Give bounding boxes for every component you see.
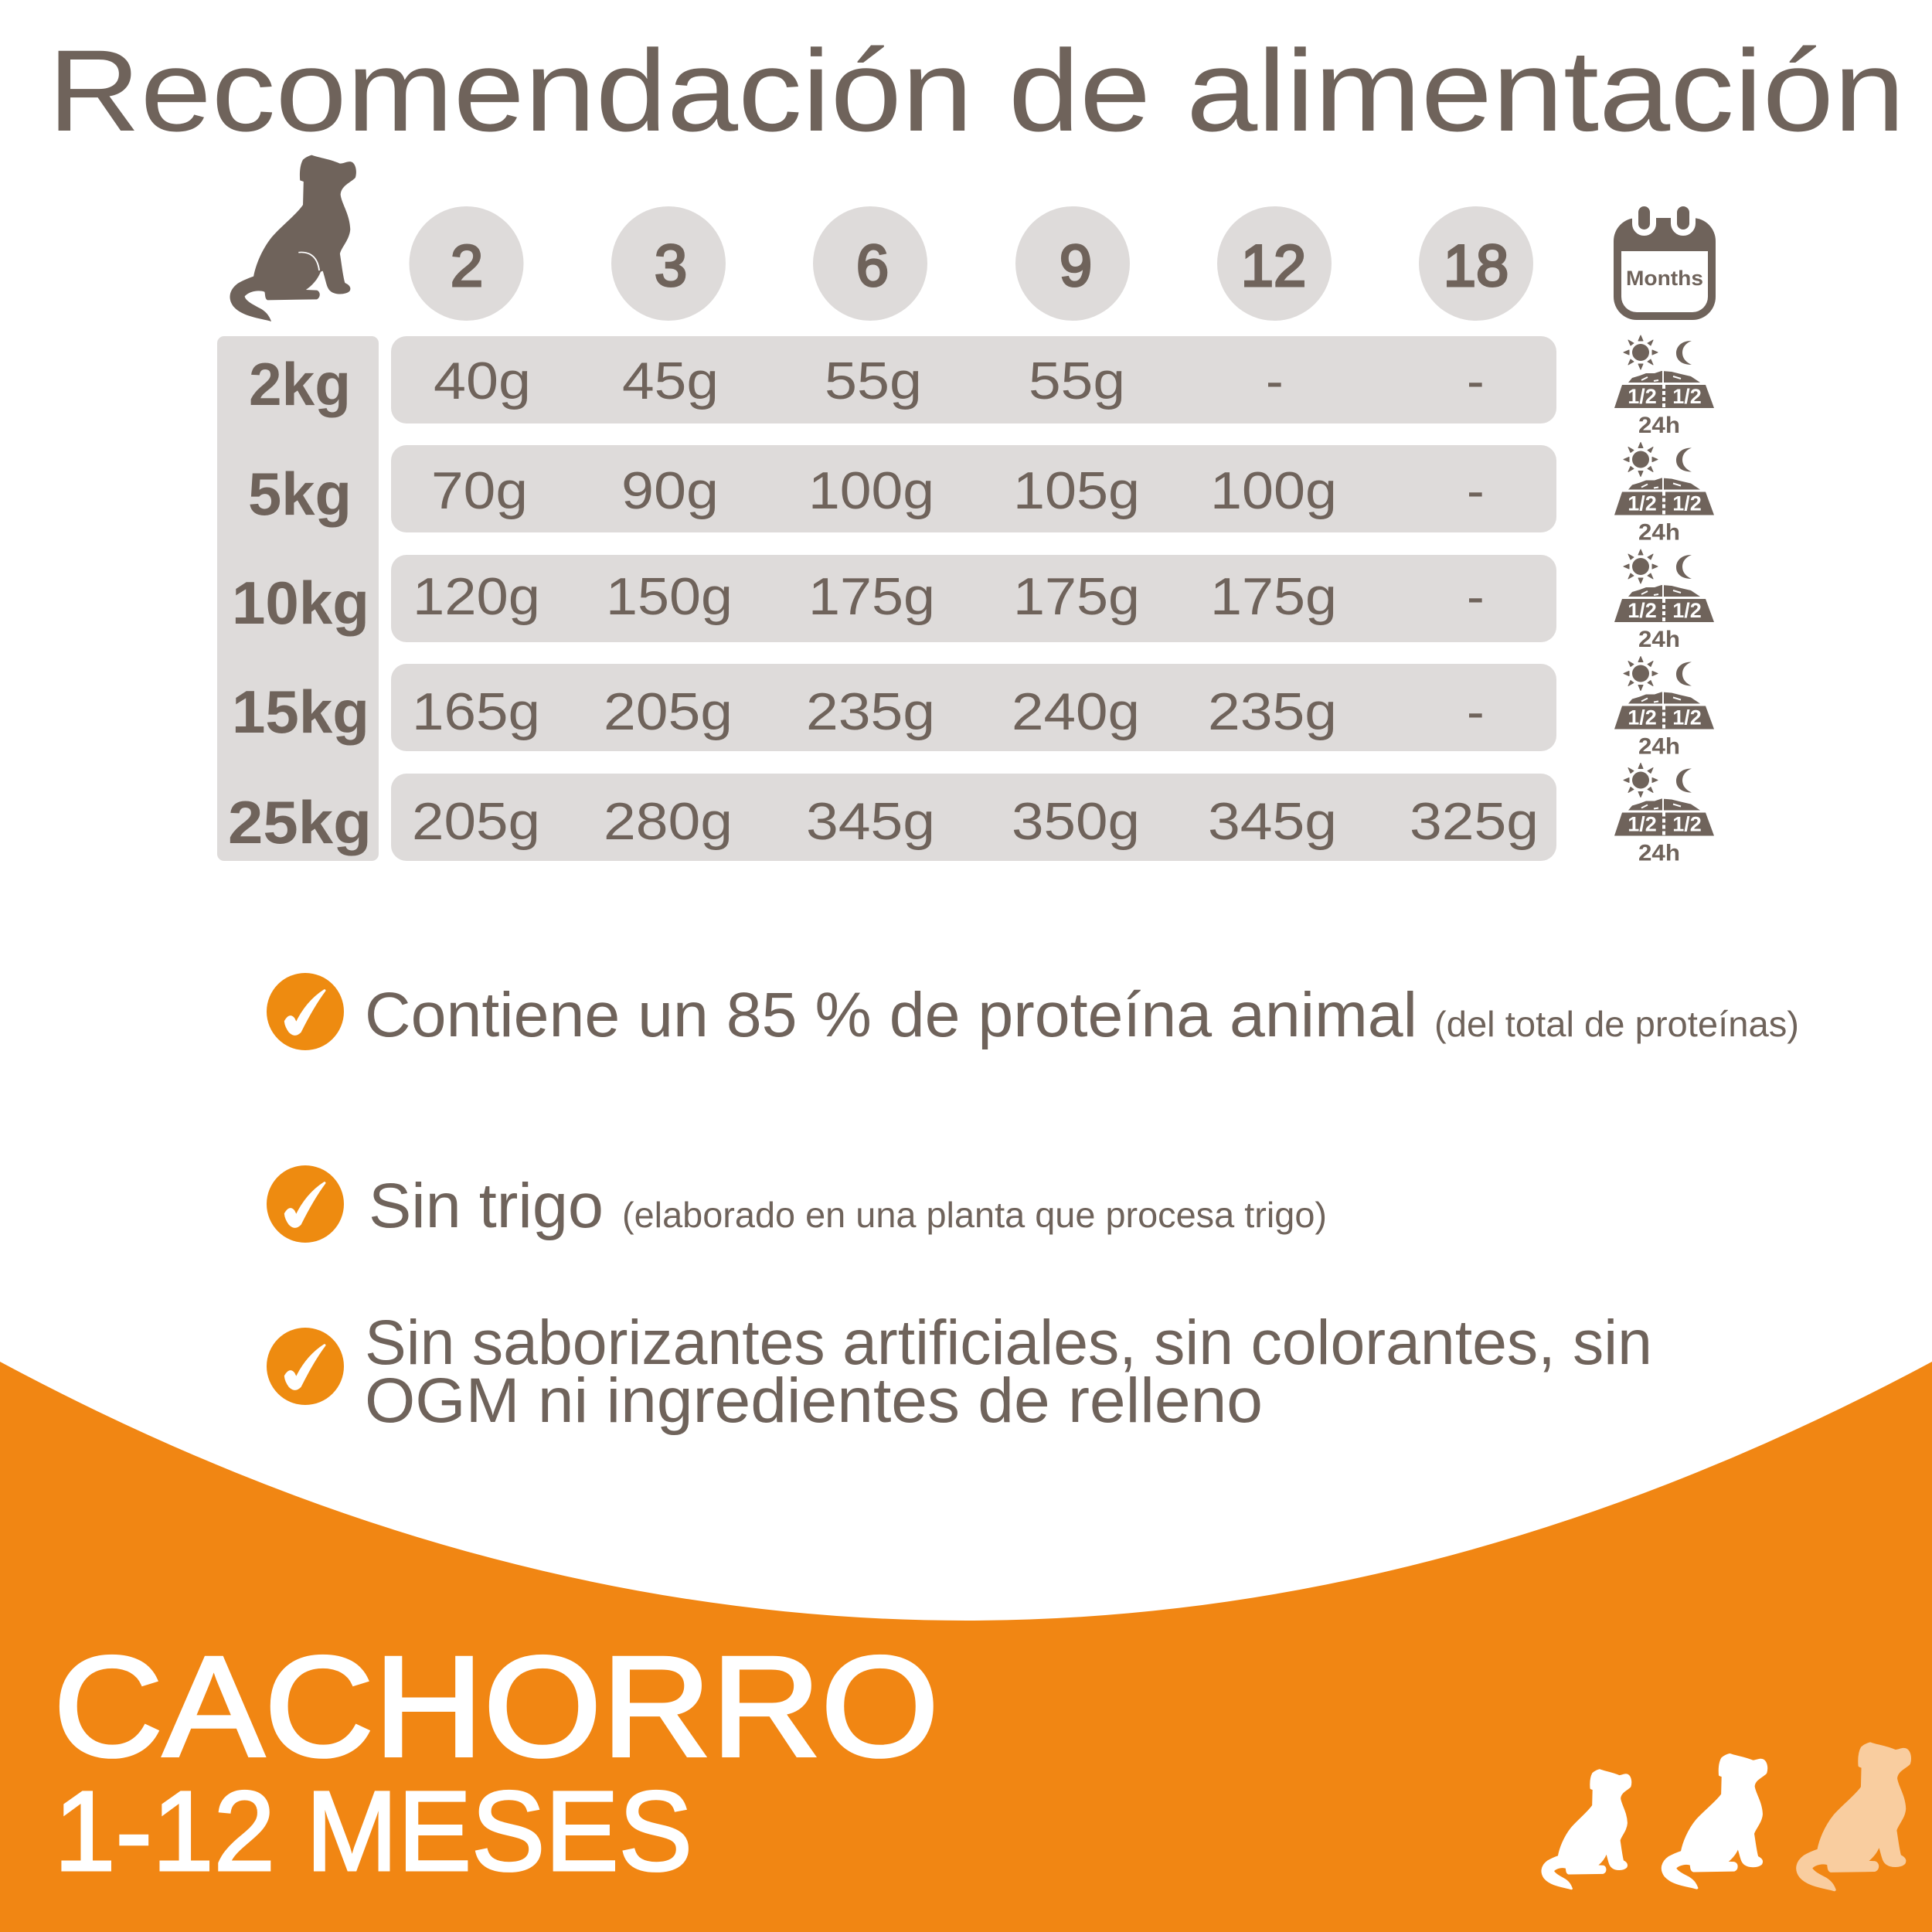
row: 25kg: 205g — [412, 792, 540, 851]
footer subheading: age: 1-12 MESES — [54, 1768, 692, 1895]
icon: feeding 15kg: 1/2 — [1672, 706, 1702, 730]
age header circles — [410, 206, 1533, 321]
age header circles: 9 — [1060, 233, 1092, 299]
row: 10kg: 175g — [1210, 567, 1337, 626]
icon: feeding 25kg: 1/2 — [1672, 813, 1702, 836]
benefit: wheat free: Sin trigo — [369, 1171, 604, 1241]
icon: feeding 25kg: 24h — [1638, 841, 1680, 866]
benefit: animal protein: Contiene un 85 % de proteína animal — [365, 980, 1417, 1050]
icon: feeding 15kg — [1614, 657, 1714, 759]
icon: feeding 25kg: 1/2 — [1628, 813, 1657, 836]
row: 2kg: - — [1467, 352, 1485, 410]
row: 25kg: 345g — [1208, 792, 1337, 851]
icon: feeding 10kg: 1/2 — [1628, 599, 1657, 622]
icon: months calendar — [1614, 206, 1716, 320]
age header circles: 2 — [451, 233, 483, 299]
row: 2kg: 55g — [1029, 352, 1125, 410]
icon: check 1 — [267, 973, 344, 1050]
benefit: no artificial additives: OGM ni ingredientes de relleno — [365, 1366, 1263, 1436]
icon: feeding 5kg: 1/2 — [1628, 492, 1657, 515]
row: 2kg: 40g — [434, 352, 531, 410]
row: 5kg: 70g — [431, 461, 528, 520]
icon: large puppy — [1798, 1743, 1910, 1889]
icon: feeding 15kg: 1/2 — [1628, 706, 1657, 730]
row: 5kg: 100g — [808, 461, 934, 520]
icon: feeding 2kg — [1614, 335, 1714, 438]
row: 25kg: 350g — [1012, 792, 1140, 851]
orange footer background — [0, 1362, 1932, 1932]
icon: feeding 15kg: 24h — [1638, 734, 1680, 759]
row: 25kg — [391, 774, 1556, 861]
icon: feeding 5kg: 24h — [1638, 519, 1680, 546]
footer heading: cachorro: CACHORRO — [53, 1628, 939, 1787]
weight column: 2kg — [249, 350, 351, 418]
benefit: wheat free — [369, 1171, 1327, 1241]
row: 15kg: - — [1467, 682, 1485, 741]
row: 2kg: - — [1266, 352, 1284, 410]
row: 5kg: 90g — [621, 461, 719, 520]
age header circles: 6 — [856, 233, 889, 299]
row: 10kg: 150g — [606, 567, 733, 626]
title: Recomendación de alimentación — [48, 26, 1905, 155]
row: 5kg: 105g — [1013, 461, 1140, 520]
benefit: no artificial additives: Sin saborizantes artificiales, sin colorantes, sin — [365, 1308, 1652, 1378]
age header circles: 18 — [1444, 233, 1509, 299]
row: 15kg: 235g — [806, 682, 935, 741]
weight column: 5kg — [248, 460, 352, 528]
benefit: wheat free: (elaborado en una planta que procesa trigo) — [622, 1195, 1327, 1235]
row: 10kg: 175g — [808, 567, 935, 626]
icon: feeding 10kg: 24h — [1638, 627, 1680, 652]
row: 15kg: 205g — [604, 682, 733, 741]
icon: check 3 — [267, 1328, 344, 1405]
row: 10kg — [391, 555, 1556, 642]
icon: feeding 10kg: 1/2 — [1672, 599, 1702, 622]
icon: feeding 5kg: 1/2 — [1672, 492, 1702, 515]
row: 25kg: 280g — [604, 792, 733, 851]
benefit: no artificial additives — [365, 1308, 1652, 1436]
row: 10kg: - — [1467, 567, 1485, 626]
row: 15kg: 240g — [1012, 682, 1140, 741]
weight column — [217, 336, 379, 861]
row: 15kg — [391, 664, 1556, 751]
benefit: animal protein: (del total de proteínas) — [1434, 1004, 1799, 1044]
icon: feeding 2kg: 1/2 — [1672, 385, 1702, 408]
row: 5kg — [391, 445, 1556, 532]
weight column: 25kg — [228, 788, 372, 856]
icon: check 2 — [267, 1165, 344, 1243]
icon: feeding 2kg: 1/2 — [1628, 385, 1657, 408]
row: 15kg: 165g — [412, 682, 540, 741]
weight column: 10kg — [232, 569, 369, 637]
age header circles: 3 — [655, 233, 687, 299]
icon: months calendar: Months — [1626, 267, 1703, 290]
icon: sitting puppy — [230, 155, 356, 321]
row: 2kg: 55g — [825, 352, 922, 410]
row: 25kg: 345g — [806, 792, 935, 851]
icon: feeding 10kg — [1614, 549, 1714, 652]
row: 5kg: 100g — [1210, 461, 1337, 520]
icon: feeding 25kg — [1614, 764, 1714, 866]
row: 15kg: 235g — [1208, 682, 1337, 741]
icon: medium puppy — [1663, 1755, 1766, 1888]
row: 2kg: 45g — [622, 352, 719, 410]
age header circles: 12 — [1241, 233, 1306, 299]
row: 10kg: 175g — [1013, 567, 1140, 626]
icon: feeding 5kg — [1614, 442, 1714, 546]
icon: small puppy — [1543, 1770, 1631, 1889]
icon: feeding 2kg: 24h — [1638, 413, 1680, 438]
row: 10kg: 120g — [413, 567, 540, 626]
row: 25kg: 325g — [1410, 792, 1539, 851]
weight column: 15kg — [232, 678, 369, 746]
row: 2kg — [391, 336, 1556, 423]
row: 5kg: - — [1467, 461, 1485, 520]
